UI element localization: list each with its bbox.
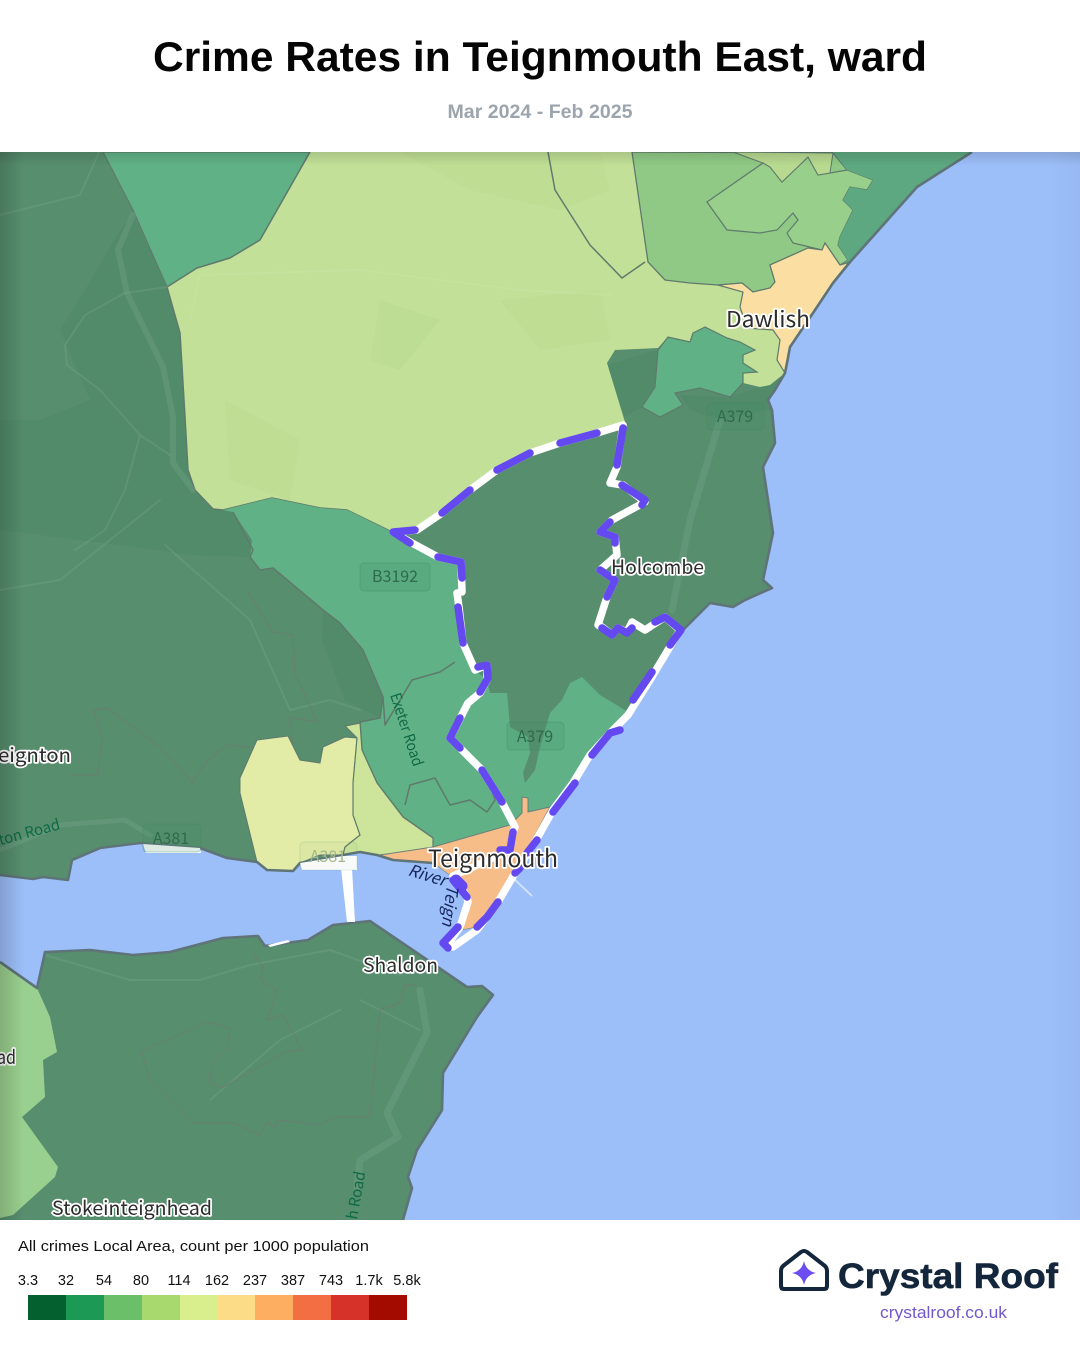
region: inner Dawlish north — [707, 157, 873, 265]
map vignette — [0, 152, 1080, 1220]
road badge A381 west: A381 — [153, 825, 189, 849]
road badge A381 east — [300, 842, 357, 870]
A381 road strip on the shore — [143, 844, 357, 947]
legend — [18, 1238, 421, 1320]
legend values: 3.3 — [18, 1273, 38, 1289]
region: south-west light green — [0, 962, 58, 1218]
region: mid green west of Teignmouth — [223, 498, 628, 848]
place label: Teignmouth: Teignmouth — [428, 839, 558, 874]
legend values: 54 — [96, 1273, 112, 1289]
legend values: 387 — [281, 1273, 305, 1289]
road badge A379 north: A379 — [717, 403, 753, 427]
yellow-green texture — [225, 152, 610, 500]
wordmark: Crystal Roof — [838, 1257, 1058, 1296]
legend values: 80 — [133, 1273, 149, 1289]
road badge A381 west — [143, 824, 201, 852]
legend values — [18, 1273, 421, 1289]
region: hill north of Dawlish — [548, 152, 645, 278]
legend values: 5.8k — [393, 1273, 421, 1289]
legend values: 162 — [205, 1273, 229, 1289]
road badge A379 north — [707, 403, 764, 430]
region: Dawlish orange-yellow — [718, 243, 850, 373]
coastline stroke — [0, 152, 972, 1220]
road label: Exeter Road: Exeter Road — [385, 690, 429, 769]
road badge B3192 — [360, 563, 430, 591]
region: top-left mid green — [103, 152, 310, 287]
region: light green Dawlish north — [631, 152, 846, 292]
internal boundary: Exeter Road area — [383, 662, 495, 812]
light roads — [0, 150, 720, 1187]
place label: Shaldon: Shaldon — [363, 949, 438, 978]
darker land shading — [0, 215, 785, 718]
place label: Holcombe: Holcombe — [611, 551, 704, 580]
region: green patch south of Dawlish — [642, 327, 757, 417]
legend values: 114 — [167, 1273, 191, 1289]
legend title: All crimes Local Area, count per 1000 population — [18, 1238, 369, 1255]
place label: Stokeinteignhead: Stokeinteignhead — [52, 1192, 212, 1221]
water label: River Teign: Teign — [437, 883, 466, 929]
road badge A379 south — [507, 722, 564, 750]
land base: low crime dark green — [0, 152, 838, 1220]
icon: house — [781, 1251, 827, 1289]
website link: crystalroof.co.uk — [880, 1304, 1008, 1322]
legend values: 237 — [243, 1273, 267, 1289]
ward boundary: white line — [393, 425, 680, 947]
icon: star — [792, 1261, 816, 1285]
internal boundaries — [72, 592, 417, 1135]
title: Crime Rates in Teignmouth East, ward — [153, 33, 927, 80]
legend colour scale — [28, 1295, 407, 1320]
region: mid green coast north east — [833, 152, 972, 265]
legend values: 32 — [58, 1273, 74, 1289]
region: pale yellow Bishopsteignton area — [240, 736, 360, 871]
region: upper light patch — [733, 152, 833, 182]
legend values: 743 — [319, 1273, 343, 1289]
subtitle: date range: Mar 2024 - Feb 2025 — [448, 102, 633, 123]
region: large yellow-green rural area — [167, 152, 785, 532]
water label: River Teign — [406, 857, 466, 929]
water label: River Teign: River — [406, 857, 452, 892]
legend values: 1.7k — [355, 1273, 383, 1289]
road badge A381 east: A381 — [310, 843, 346, 867]
map — [0, 150, 1080, 1221]
road badge B3192: B3192 — [372, 563, 418, 587]
place label: Dawlish: Dawlish — [726, 302, 810, 334]
road badge A379 south: A379 — [517, 723, 553, 747]
place label: Bishopsteignton fragment: eignton — [0, 739, 71, 768]
sea and estuary — [0, 152, 1080, 1220]
ward boundary: purple dashes — [393, 428, 681, 948]
region: yellow-green strip — [343, 723, 433, 855]
logo: Crystal Roof — [781, 1251, 1058, 1322]
small pier — [514, 879, 532, 897]
region: Teignmouth town centre orange — [380, 797, 550, 930]
road label: h Road: h Road — [341, 1170, 370, 1221]
